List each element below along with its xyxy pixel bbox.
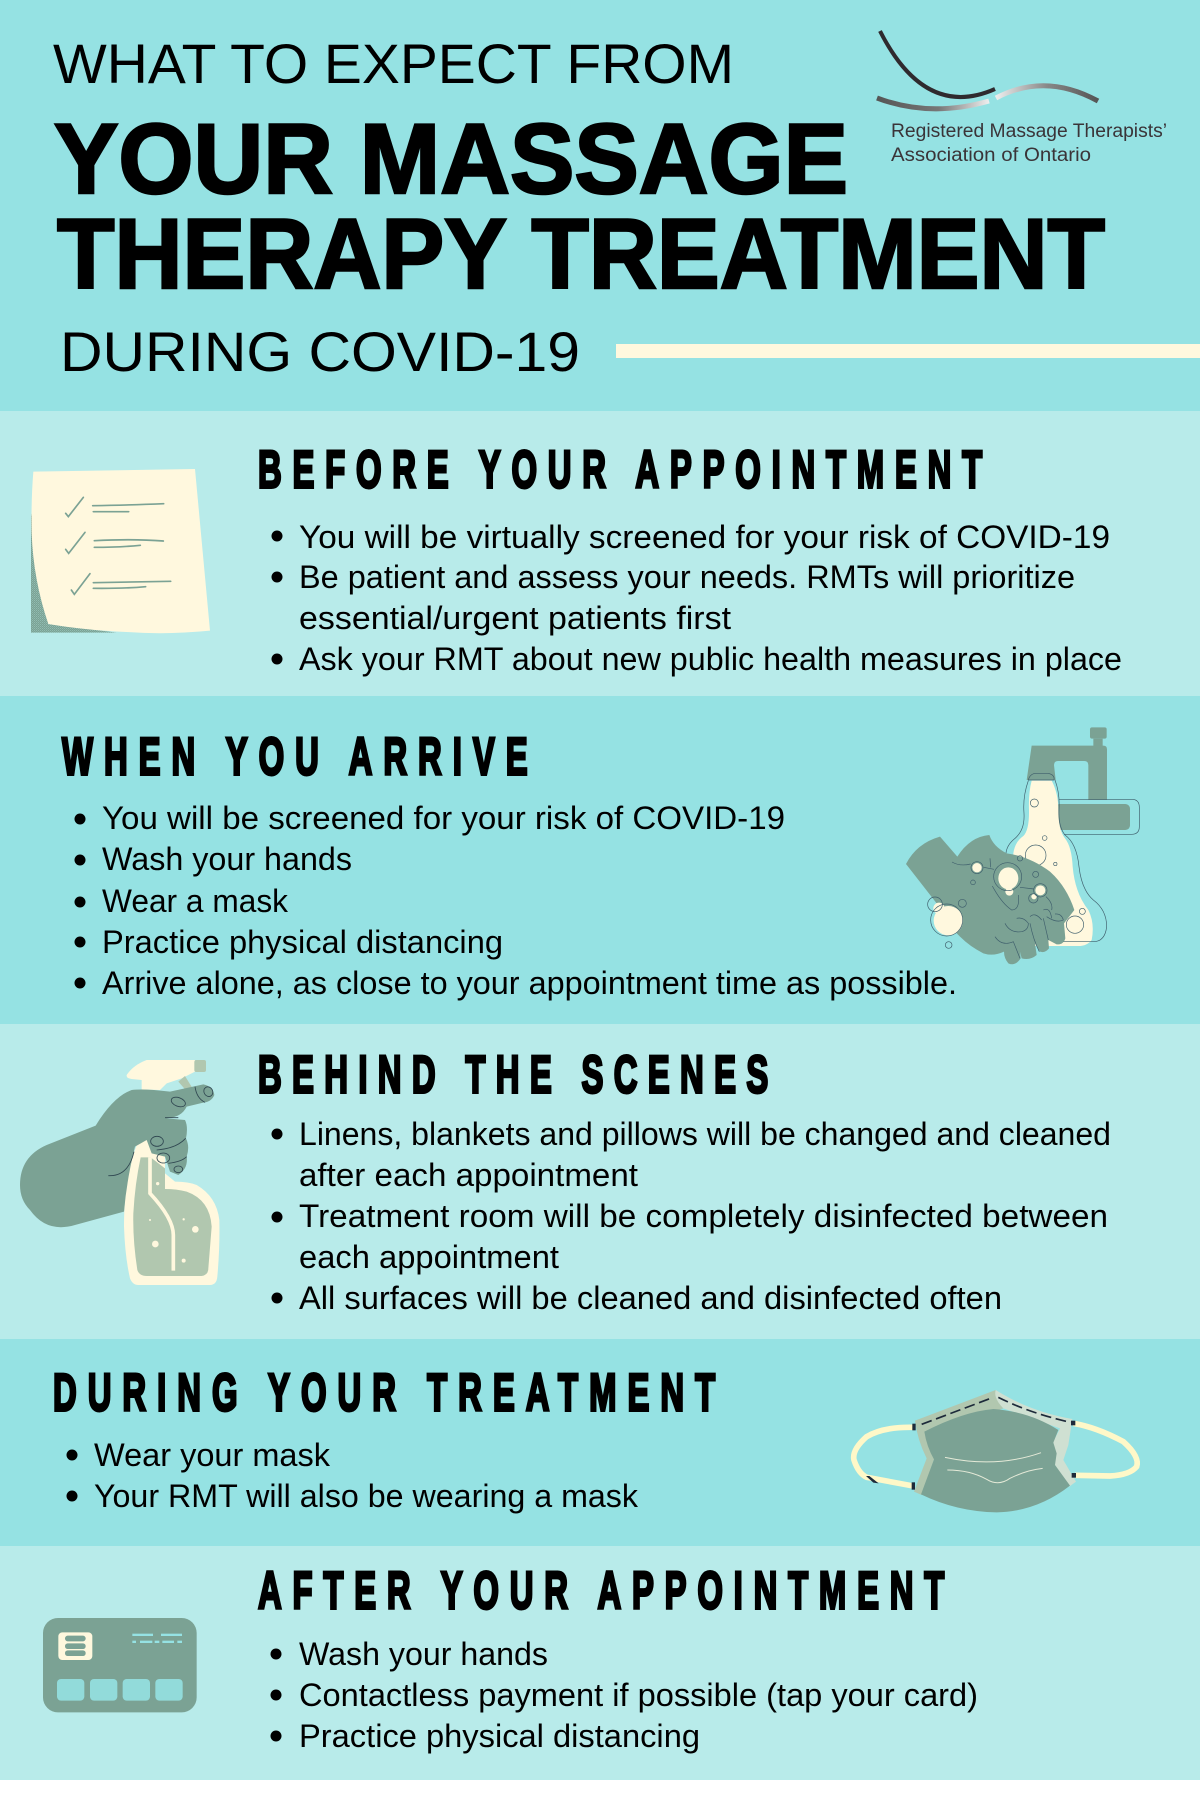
heading: before your appointment: BEFORE YOUR APPOINTMENT (258, 441, 982, 500)
bullet list: behind: Linens, blankets and pillows will be changed and cleaned (299, 1116, 1111, 1152)
heading: during your treatment: DURING YOUR TREATMENT (53, 1364, 715, 1423)
bullet list: during (66, 1437, 639, 1514)
heading: behind the scenes: BEHIND THE SCENES (258, 1046, 768, 1105)
bullet list: during: Wear your mask (94, 1437, 331, 1473)
bullet list: behind: Treatment room will be completely disinfected between (299, 1198, 1108, 1234)
bullet list: arrive: Arrive alone, as close to your appointment time as possible. (102, 965, 957, 1001)
icon: surgical mask (854, 1390, 1137, 1512)
title line: during covid-19: DURING COVID-19 (60, 320, 580, 383)
bullet list: before: Ask your RMT about new public health measures in place (299, 641, 1122, 677)
bullet list: arrive: Wash your hands (102, 841, 352, 877)
bullet list: after: Wash your hands (299, 1636, 548, 1672)
bullet list: after: Practice physical distancing (299, 1718, 700, 1754)
cream rule (616, 344, 1200, 358)
panel: behind the scenes (0, 1024, 1200, 1339)
logo: Registered Massage Therapists' Association of Ontario: Registered Massage Therapists’ (891, 121, 1167, 142)
title line: therapy treatment: THERAPY TREATMENT (57, 198, 1105, 309)
icon: checklist note (31, 469, 210, 633)
icon: payment card (43, 1618, 197, 1712)
title line: your massage: YOUR MASSAGE (54, 103, 848, 214)
bullet list: arrive (74, 800, 957, 1001)
bullet list: before: Be patient and assess your needs. RMTs will prioritize (299, 559, 1075, 595)
bullet list: during: Your RMT will also be wearing a mask (94, 1478, 639, 1514)
heading: after your appointment: AFTER YOUR APPOINTMENT (258, 1562, 944, 1621)
bullet list: after: Contactless payment if possible (tap your card) (299, 1677, 978, 1713)
panel: header (0, 0, 1200, 411)
bullet list: arrive: Wear a mask (102, 883, 289, 919)
bullet list: arrive: You will be screened for your risk of COVID-19 (102, 800, 785, 836)
icon: hand holding spray bottle (20, 1060, 219, 1285)
logo: Registered Massage Therapists' Association of Ontario: Association of Ontario (891, 145, 1091, 166)
bullet list: behind: each appointment (299, 1239, 559, 1275)
heading: when you arrive: WHEN YOU ARRIVE (62, 728, 528, 787)
panel: before your appointment (0, 411, 1200, 696)
bullet list: before (272, 519, 1122, 677)
bullet list: behind (272, 1116, 1111, 1316)
bullet list: before: You will be virtually screened for your risk of COVID-19 (299, 519, 1110, 555)
panel: when you arrive (0, 696, 1200, 1024)
bullet list: behind: after each appointment (299, 1157, 638, 1193)
bullet list: behind: All surfaces will be cleaned and disinfected often (299, 1280, 1002, 1316)
logo: Registered Massage Therapists' Association of Ontario (877, 31, 1167, 166)
bullet list: before: essential/urgent patients first (299, 600, 731, 636)
bullet list: after (270, 1636, 978, 1754)
bullet list: arrive: Practice physical distancing (102, 924, 503, 960)
panel: after your appointment (0, 1546, 1200, 1780)
icon: hands washing under faucet (906, 727, 1139, 964)
title line: what to expect from: WHAT TO EXPECT FROM (53, 32, 734, 95)
panel: during your treatment (0, 1339, 1200, 1546)
